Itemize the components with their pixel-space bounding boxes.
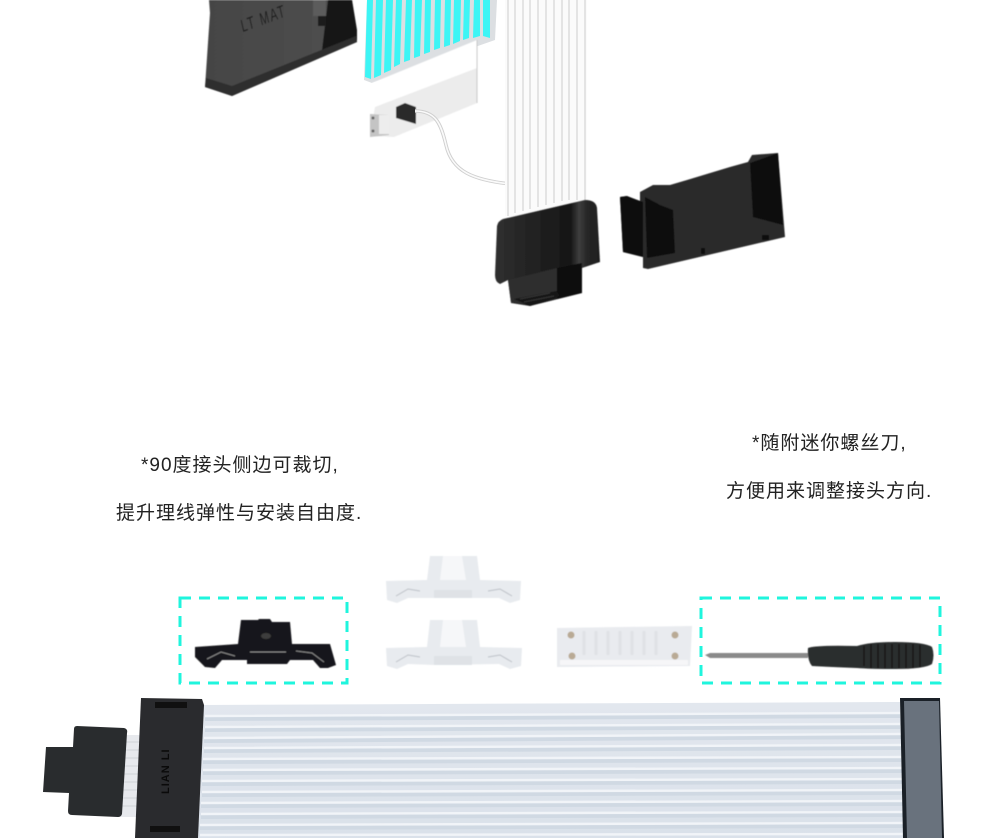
black clip (195, 619, 336, 668)
white clip upper (386, 556, 521, 603)
top left black connector cover (205, 0, 357, 96)
cyan lit diffuser strip (364, 0, 497, 83)
black 90 degree plug (495, 200, 600, 306)
black bracket cover (620, 153, 785, 269)
left end plug (43, 726, 127, 817)
white clip lower (386, 620, 522, 669)
caption: right note: 方便用来调整接头方向. (726, 480, 932, 502)
dashed highlight: screwdriver (701, 598, 940, 683)
caption: right note: *随附迷你螺丝刀, (752, 432, 907, 454)
white end plate (557, 626, 692, 667)
black cable comb with logo (135, 698, 204, 838)
vertical ribbon cable (505, 0, 587, 216)
caption: right note (726, 432, 932, 502)
black cable comb with logo: LIAN LI (160, 748, 172, 794)
caption: left note (116, 454, 362, 524)
thin white wire (415, 111, 545, 205)
small ribbon segment (120, 735, 142, 817)
top left black connector cover: LT MAT (238, 2, 289, 36)
caption: left note: 提升理线弹性与安装自由度. (116, 502, 362, 524)
caption: left note: *90度接头侧边可裁切, (141, 454, 339, 476)
dashed highlight: black clip (180, 598, 347, 683)
screwdriver (705, 642, 934, 669)
horizontal ribbon cable (198, 702, 903, 838)
right gray end cap (900, 698, 944, 838)
white mounting plate with small connectors (370, 40, 477, 137)
